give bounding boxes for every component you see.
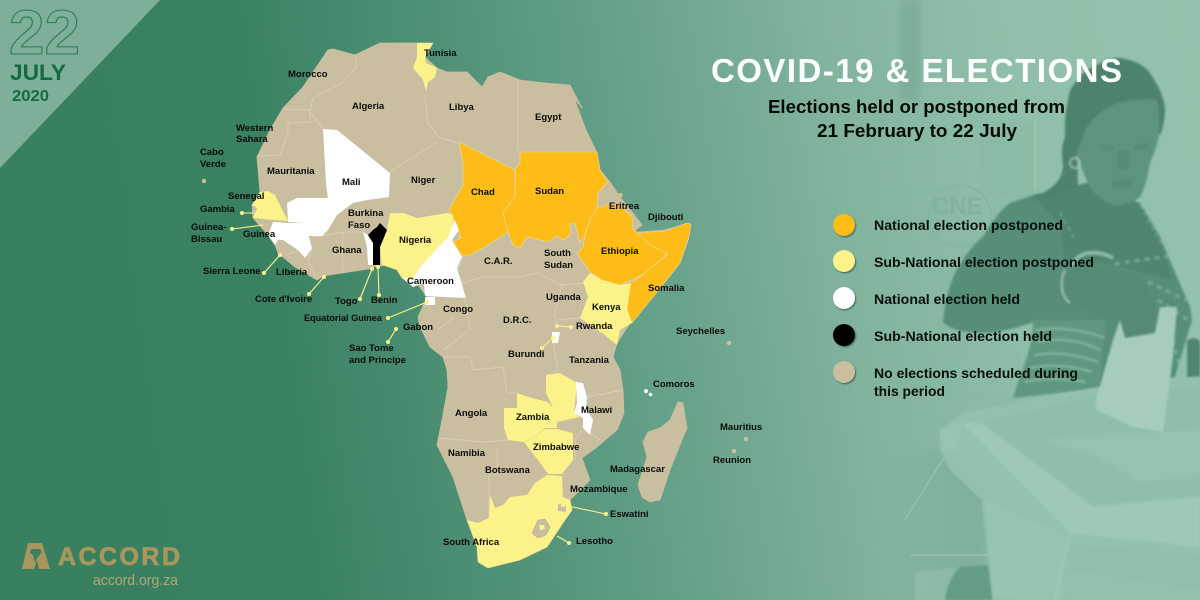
- legend item: sub-national election postponed: Sub-National election postponed: [874, 254, 1094, 270]
- country labels: Cabo: [200, 147, 224, 158]
- legend item: no elections scheduled: [833, 361, 1078, 399]
- date banner: [0, 0, 160, 168]
- country labels: Burkina: [348, 208, 384, 219]
- national election postponed: [449, 142, 691, 323]
- country labels: Faso: [348, 220, 370, 231]
- face: [1077, 99, 1159, 205]
- country labels: Benin: [371, 295, 398, 306]
- country labels: Eritrea: [609, 201, 640, 212]
- country labels: Malawi: [581, 405, 612, 416]
- hair: [1030, 58, 1165, 200]
- ACCORD logo: [22, 543, 180, 589]
- legend item: no elections scheduled: this period: [874, 383, 945, 399]
- country labels: Liberia: [276, 267, 308, 278]
- country labels: Sahara: [236, 134, 268, 145]
- country labels: Rwanda: [576, 321, 613, 332]
- country labels: Botswana: [485, 465, 531, 476]
- country labels: Eswatini: [610, 509, 649, 520]
- country labels: Reunion: [713, 455, 751, 466]
- country labels: and Principe: [349, 355, 406, 366]
- country labels: Tanzania: [569, 355, 610, 366]
- country labels: Sudan: [535, 186, 564, 197]
- country labels: Angola: [455, 408, 488, 419]
- country labels: Djibouti: [648, 212, 683, 223]
- sub-national election postponed: [252, 43, 632, 568]
- country labels: Bissau: [191, 234, 222, 245]
- date banner: JULY: [10, 60, 66, 85]
- country labels: Lesotho: [576, 536, 613, 547]
- country labels: South: [544, 248, 571, 259]
- country labels: Gabon: [403, 322, 433, 333]
- subtitle: 21 February to 22 July: [817, 120, 1018, 141]
- background photo: woman casting ballot: [880, 0, 1200, 600]
- country labels: Egypt: [535, 112, 562, 123]
- country labels: Libya: [449, 102, 475, 113]
- country labels: Morocco: [288, 69, 328, 80]
- legend item: national election postponed: [833, 214, 1063, 236]
- legend item: no elections scheduled: No elections scheduled during: [874, 365, 1078, 381]
- map of Africa: [191, 43, 762, 568]
- country labels: Madagascar: [610, 464, 665, 475]
- country labels: D.R.C.: [503, 315, 532, 326]
- country labels: Burundi: [508, 349, 544, 360]
- country labels: Nigeria: [399, 235, 432, 246]
- subtitle: Elections held or postponed from: [768, 96, 1065, 117]
- country labels: Mozambique: [570, 484, 628, 495]
- country labels: Mauritania: [267, 166, 315, 177]
- base continent: no elections scheduled: [252, 43, 690, 568]
- country labels: Sao Tome: [349, 343, 394, 354]
- national election held: [268, 129, 652, 435]
- furniture and floor: [880, 450, 985, 600]
- country labels: Mali: [342, 177, 360, 188]
- sub-national election held: Benin: [368, 223, 387, 265]
- country labels: Senegal: [228, 191, 264, 202]
- legend item: sub-national election held: Sub-National election held: [874, 328, 1052, 344]
- country labels: South Africa: [443, 537, 500, 548]
- legend item: sub-national election postponed: [833, 250, 1094, 272]
- country labels: Ghana: [332, 245, 362, 256]
- country labels: Zambia: [516, 412, 550, 423]
- icon: logo mark: [22, 543, 50, 569]
- country labels: Ethiopia: [601, 246, 639, 257]
- date banner: 22: [9, 0, 80, 68]
- country labels: Chad: [471, 187, 495, 198]
- Lesotho and Eswatini enclaves: [532, 504, 566, 538]
- country labels: [191, 48, 762, 548]
- country labels: Togo: [335, 296, 358, 307]
- country labels: Mauritius: [720, 422, 762, 433]
- leader lines with dots: [230, 211, 608, 545]
- country labels: Guinea-: [191, 222, 226, 233]
- country labels: Uganda: [546, 292, 582, 303]
- date banner: 2020: [12, 88, 49, 105]
- country labels: Equatorial Guinea: [304, 313, 383, 324]
- country labels: Western: [236, 123, 274, 134]
- country labels: Algeria: [352, 101, 385, 112]
- body and arm: [943, 183, 1192, 398]
- country labels: Sudan: [544, 260, 573, 271]
- ballot box: [940, 377, 1200, 600]
- subtitle: [768, 96, 1065, 141]
- country labels: Kenya: [592, 302, 621, 313]
- legend item: national election postponed: National election postponed: [874, 217, 1063, 233]
- country labels: C.A.R.: [484, 256, 512, 267]
- country labels: Verde: [200, 159, 226, 170]
- ACCORD logo: accord.org.za: [93, 572, 179, 589]
- Madagascar: [638, 402, 687, 502]
- country labels: Cote d'Ivoire: [255, 294, 312, 305]
- country labels: Cameroon: [407, 276, 454, 287]
- country borders: [257, 55, 623, 518]
- ACCORD logo: ACCORD: [58, 543, 180, 571]
- legend item: national election held: National election held: [874, 291, 1020, 307]
- ballot paper: [1095, 307, 1177, 432]
- legend item: sub-national election held: [833, 324, 1052, 346]
- country labels: Gambia: [200, 204, 236, 215]
- islands: [202, 179, 748, 453]
- country labels: Somalia: [648, 283, 685, 294]
- country labels: Sierra Leone: [203, 266, 261, 277]
- hand: [1064, 267, 1157, 339]
- legend: [833, 214, 1094, 399]
- country labels: Comoros: [653, 379, 695, 390]
- title: COVID-19 & ELECTIONS: [711, 52, 1122, 89]
- country labels: Congo: [443, 304, 473, 315]
- country labels: Guinea: [243, 229, 276, 240]
- country labels: Niger: [411, 175, 436, 186]
- legend item: national election held: [833, 287, 1020, 309]
- country labels: Seychelles: [676, 326, 725, 337]
- background photo: woman casting ballot: CNE: [932, 193, 983, 220]
- country labels: Zimbabwe: [533, 442, 579, 453]
- country labels: Tunisia: [424, 48, 457, 59]
- country labels: Namibia: [448, 448, 486, 459]
